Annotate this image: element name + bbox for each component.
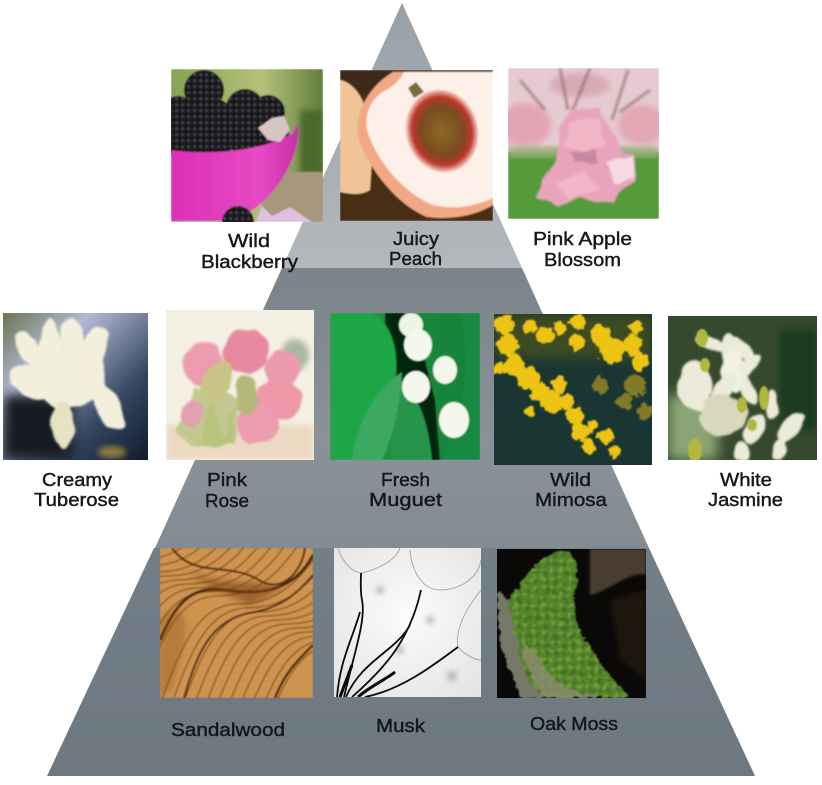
label: wild mimosa: Mimosa <box>535 490 608 510</box>
photo: fresh muguet <box>330 313 480 460</box>
pyramid top tier <box>282 3 522 268</box>
label: creamy tuberose: Creamy <box>42 470 112 490</box>
label: pink apple blossom: Blossom <box>544 250 621 270</box>
label: pink apple blossom <box>533 229 632 270</box>
label: oak moss: Oak Moss <box>530 714 618 734</box>
photo: wild mimosa <box>492 314 653 465</box>
label: wild blackberry: Wild <box>228 231 270 251</box>
label: white jasmine: White <box>720 470 772 490</box>
photo: juicy peach <box>340 70 493 221</box>
photo: musk <box>334 548 481 697</box>
photo: pink apple blossom <box>499 68 666 219</box>
label: wild blackberry: Blackberry <box>201 252 298 272</box>
pyramid middle tier <box>155 268 649 548</box>
label: fresh muguet: Fresh <box>381 470 430 490</box>
label: juicy peach <box>389 229 442 269</box>
photo: creamy tuberose <box>3 313 148 460</box>
label: pink apple blossom: Pink Apple <box>533 229 632 249</box>
label: white jasmine <box>708 470 783 510</box>
label: wild mimosa: Wild <box>550 470 591 490</box>
label: pink rose: Rose <box>205 491 249 511</box>
photo: oak moss <box>497 549 646 698</box>
label: wild blackberry <box>201 231 298 272</box>
label: creamy tuberose: Tuberose <box>34 490 119 510</box>
label: juicy peach: Peach <box>389 249 442 269</box>
label: fresh muguet: Muguet <box>369 490 442 510</box>
label: fresh muguet <box>369 470 442 510</box>
photo: white jasmine <box>668 316 817 462</box>
label: juicy peach: Juicy <box>393 229 439 249</box>
label: pink rose <box>205 470 249 511</box>
label: white jasmine: Jasmine <box>708 490 783 510</box>
pyramid base tier <box>47 548 755 776</box>
label: creamy tuberose <box>34 470 119 510</box>
label: wild mimosa <box>535 470 608 510</box>
label: musk: Musk <box>376 716 426 736</box>
photo: sandalwood <box>160 548 313 698</box>
photo: wild blackberry <box>171 69 323 222</box>
photo: pink rose <box>166 310 314 460</box>
label: sandalwood: Sandalwood <box>171 720 285 740</box>
label: pink rose: Pink <box>207 470 248 490</box>
